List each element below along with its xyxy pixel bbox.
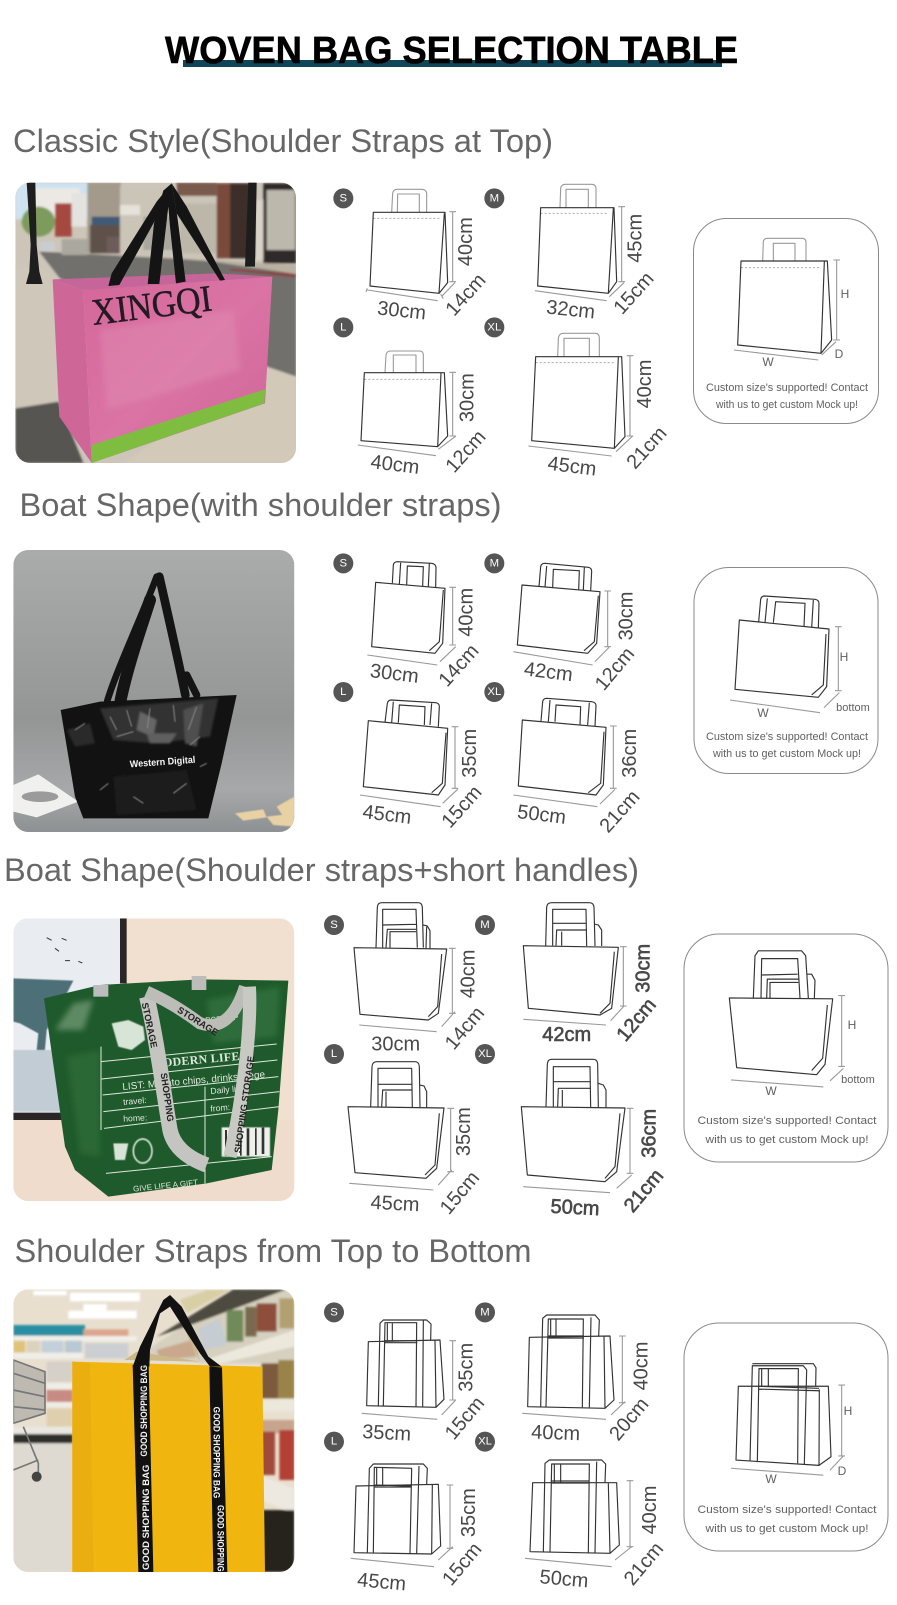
- heading: boat shape with shoulder straps: Boat Shape(with shoulder straps): [20, 487, 501, 523]
- size S: S: [330, 919, 338, 931]
- size S: 30cm: [371, 1033, 420, 1055]
- size S: 14cm: [441, 269, 491, 321]
- size diagrams: straps and short handles: [324, 903, 668, 1220]
- size XL: 36cm: [638, 1109, 660, 1158]
- size M: 40cm: [531, 1421, 580, 1445]
- size L: 15cm: [436, 1167, 484, 1219]
- custom size card: straps top to bottom: with us to get custom Mock up!: [704, 1523, 868, 1535]
- size M: 30cm: [616, 592, 638, 640]
- size XL: 36cm: [619, 729, 641, 778]
- custom size card: boat shape: H: [840, 650, 848, 664]
- size XL: 50cm: [550, 1196, 600, 1220]
- size L: [333, 317, 491, 479]
- size S: [333, 188, 491, 324]
- photo: yellow shopping bag: GOOD SHOPPING: [215, 1505, 225, 1572]
- photo: pink XINGQI bag: XINGQI: [89, 279, 214, 334]
- photo: black Western Digital bag: [13, 550, 294, 832]
- size S: [324, 1302, 489, 1446]
- photo: green shopping bag: GIVE LIFE A GIFT: [133, 1178, 199, 1194]
- size L: 12cm: [441, 426, 491, 477]
- size L: 35cm: [459, 729, 481, 778]
- size XL: 21cm: [620, 1538, 668, 1590]
- photo: pink XINGQI bag: [15, 183, 296, 463]
- custom size card: classic: W: [762, 355, 774, 369]
- custom size card: classic: D: [835, 347, 844, 361]
- photo: green shopping bag: SHOPPING STORAGE: [233, 1055, 256, 1154]
- size S: 35cm: [362, 1421, 412, 1446]
- custom size card: straps top to bottom: W: [765, 1472, 777, 1486]
- size S: [333, 553, 484, 691]
- size L: 15cm: [437, 781, 487, 833]
- photo: green shopping bag: LIST: Mil tato chips, drinks, vege: [122, 1070, 266, 1093]
- heading: shoulder straps top to bottom: Shoulder Straps from Top to Bottom: [14, 1233, 532, 1269]
- size XL: [475, 1432, 668, 1592]
- size M: 12cm: [613, 994, 661, 1046]
- size L: L: [340, 686, 346, 698]
- photo: yellow shopping bag: [13, 1289, 294, 1572]
- size S: 40cm: [455, 217, 477, 266]
- size XL: 45cm: [546, 453, 598, 481]
- custom size card: straps and handles: [684, 934, 888, 1162]
- custom size card: straps top to bottom: D: [838, 1464, 847, 1478]
- photo: yellow shopping bag: GOOD SHOPPING BAG: [141, 1465, 151, 1570]
- size XL: 50cm: [539, 1566, 589, 1592]
- size XL: [484, 317, 672, 481]
- custom size card: straps and handles: H: [848, 1018, 856, 1032]
- size L: 40cm: [369, 451, 421, 479]
- size M: 40cm: [631, 1342, 653, 1390]
- size S: S: [340, 557, 348, 569]
- size S: 15cm: [441, 1393, 489, 1444]
- photo: black Western Digital bag: Western Digital: [129, 755, 196, 770]
- size XL: XL: [487, 686, 501, 698]
- size S: 14cm: [434, 640, 484, 691]
- size S: S: [330, 1306, 338, 1318]
- photo: green shopping bag: Daily life:: [210, 1083, 246, 1096]
- size M: 32cm: [545, 297, 596, 323]
- photo: yellow shopping bag: GOOD SHOPPING BAG: [211, 1407, 221, 1498]
- photo: green shopping bag: home:: [123, 1112, 147, 1124]
- size XL: 50cm: [516, 801, 567, 829]
- size L: [324, 1432, 486, 1595]
- photo: green shopping bag: [13, 918, 294, 1201]
- size diagrams: boat shape with shoulder straps: [333, 553, 645, 837]
- size M: 42cm: [542, 1024, 591, 1046]
- size L: L: [331, 1048, 337, 1060]
- size L: 35cm: [458, 1488, 480, 1537]
- size diagrams: straps top to bottom: [324, 1302, 668, 1595]
- size L: L: [340, 321, 346, 333]
- custom size card: classic: with us to get custom Mock up!: [715, 399, 858, 411]
- size XL: 21cm: [622, 422, 672, 474]
- custom size card: boat shape: Custom size's supported! Contact: [706, 731, 868, 743]
- size XL: [475, 1044, 668, 1220]
- size M: 15cm: [609, 268, 659, 319]
- size M: 20cm: [605, 1394, 653, 1445]
- photo: yellow shopping bag: GOOD SHOPPING BAG: [139, 1365, 149, 1457]
- size M: [484, 184, 659, 323]
- size M: M: [480, 1306, 490, 1318]
- custom size card: classic: [694, 218, 878, 424]
- size XL: 21cm: [595, 786, 645, 837]
- size L: 45cm: [361, 801, 413, 829]
- size L: L: [331, 1436, 337, 1448]
- photo: green shopping bag: ODERN LIFE: [162, 1049, 240, 1070]
- size M: 42cm: [523, 658, 574, 686]
- size XL: XL: [478, 1048, 492, 1060]
- photo: green shopping bag: travel:: [123, 1095, 147, 1107]
- size L: [324, 1044, 484, 1219]
- custom size card: boat shape: with us to get custom Mock up!: [712, 748, 861, 760]
- size S: 40cm: [457, 950, 479, 998]
- size XL: 21cm: [620, 1165, 668, 1217]
- title: WOVEN BAG SELECTION TABLE: [165, 30, 738, 72]
- size L: [333, 682, 487, 833]
- size XL: 40cm: [639, 1486, 661, 1534]
- custom size card: classic: H: [841, 287, 849, 301]
- size S: 30cm: [369, 660, 420, 688]
- size M: 12cm: [591, 643, 639, 695]
- heading: boat shape straps and handles: Boat Shape(Shoulder straps+short handles): [4, 852, 639, 888]
- custom size card: straps and handles: with us to get custom Mock up!: [704, 1134, 868, 1146]
- size L: 15cm: [438, 1539, 486, 1590]
- custom size card: classic: Custom size's supported! Contact: [706, 382, 868, 394]
- custom size card: boat shape: [694, 568, 878, 774]
- custom size card: straps and handles: W: [765, 1084, 777, 1098]
- size M: M: [490, 192, 499, 204]
- photo: green shopping bag: LARGE CAP: [196, 1013, 239, 1025]
- heading: classic style: Classic Style(Shoulder Straps at Top): [13, 123, 553, 159]
- size M: [475, 903, 661, 1046]
- size diagrams: classic style: [333, 184, 672, 481]
- size M: M: [490, 557, 499, 569]
- size XL: [484, 682, 645, 837]
- size S: 14cm: [441, 1003, 489, 1054]
- size M: 30cm: [632, 944, 654, 993]
- size L: 45cm: [356, 1569, 407, 1595]
- size L: 35cm: [453, 1107, 475, 1156]
- photo: green shopping bag: STORAGE: [176, 1005, 220, 1038]
- custom size card: boat shape: bottom: [836, 702, 870, 714]
- size XL: XL: [478, 1436, 492, 1448]
- size M: 45cm: [625, 214, 647, 263]
- photo: green shopping bag: from:: [210, 1102, 230, 1114]
- custom size card: straps top to bottom: Custom size's supported! Contact: [698, 1504, 876, 1516]
- size L: 30cm: [456, 373, 478, 422]
- custom size card: straps and handles: Custom size's supported! Contact: [698, 1115, 876, 1127]
- size S: 35cm: [456, 1343, 478, 1392]
- custom size card: straps top to bottom: [684, 1323, 888, 1551]
- photo: green shopping bag: SHOPPING: [159, 1072, 175, 1122]
- size L: 45cm: [370, 1192, 420, 1216]
- size XL: 40cm: [634, 360, 656, 408]
- size S: 40cm: [456, 588, 478, 637]
- size M: M: [480, 919, 490, 931]
- custom size card: boat shape: W: [757, 706, 769, 720]
- size M: [484, 553, 639, 695]
- size S: S: [340, 192, 348, 204]
- size M: [475, 1302, 653, 1445]
- custom size card: straps top to bottom: H: [844, 1404, 852, 1418]
- custom size card: straps and handles: bottom: [841, 1074, 875, 1086]
- size S: [324, 903, 489, 1055]
- size XL: XL: [487, 321, 501, 333]
- size S: 30cm: [376, 298, 427, 324]
- photo: green shopping bag: STORAGE: [140, 1002, 159, 1049]
